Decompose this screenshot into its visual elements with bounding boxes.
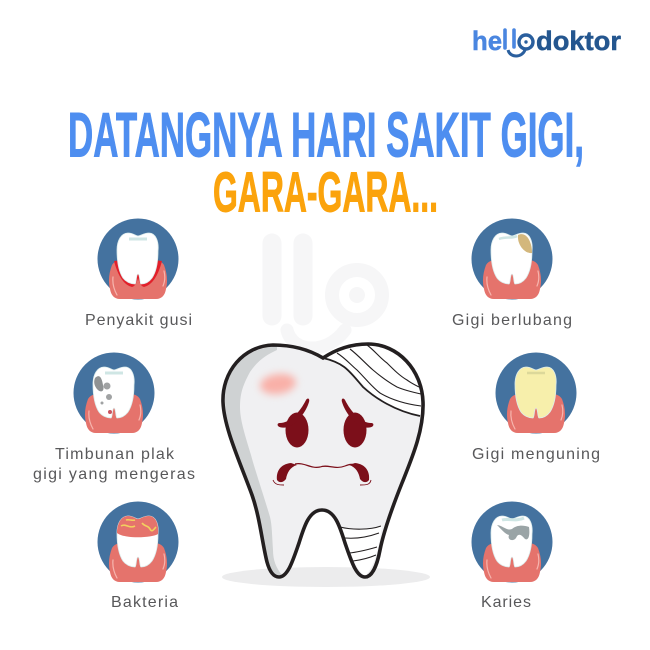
logo: hellodoktor: he xyxy=(472,26,502,56)
watermark: stethoscope xyxy=(272,243,382,348)
item: Penyakit gusi xyxy=(85,218,192,329)
item: Gigi berlubang xyxy=(452,218,572,329)
icon: yellow tooth xyxy=(496,352,576,434)
item: Gigi menguning xyxy=(472,352,600,463)
logo: hellodoktor: doktor xyxy=(536,26,621,56)
icon: bacteria tooth xyxy=(98,502,178,582)
item: Timbunan plak: gigi yang mengeras xyxy=(33,466,195,483)
label: Bakteria xyxy=(111,594,178,611)
tooth body xyxy=(223,344,423,577)
item: Timbunan plak xyxy=(33,352,195,483)
bruise xyxy=(259,372,297,396)
head bandage xyxy=(323,344,423,416)
label: Timbunan plak xyxy=(55,446,175,463)
icon: plaque tooth xyxy=(74,352,154,434)
icon: caries tooth xyxy=(472,502,552,582)
icon: inflamed gums xyxy=(98,218,178,300)
title xyxy=(68,100,584,224)
label: Gigi menguning xyxy=(472,446,600,463)
label: Karies xyxy=(481,594,531,611)
item: Bakteria xyxy=(98,502,178,611)
root bandage xyxy=(339,526,382,576)
title line 2: GARA-GARA... xyxy=(213,160,438,224)
item: Karies xyxy=(472,502,552,611)
tooth character xyxy=(222,344,430,587)
logo: hellodoktor xyxy=(472,26,621,56)
right eye xyxy=(342,399,373,448)
icon: cavity tooth xyxy=(472,218,552,300)
tooth outline xyxy=(223,344,423,577)
label: Penyakit gusi xyxy=(85,312,192,329)
left eye xyxy=(278,399,309,448)
ground shadow xyxy=(222,567,430,587)
tooth side shade xyxy=(225,346,282,575)
label: Gigi berlubang xyxy=(452,312,572,329)
mouth xyxy=(273,463,371,485)
